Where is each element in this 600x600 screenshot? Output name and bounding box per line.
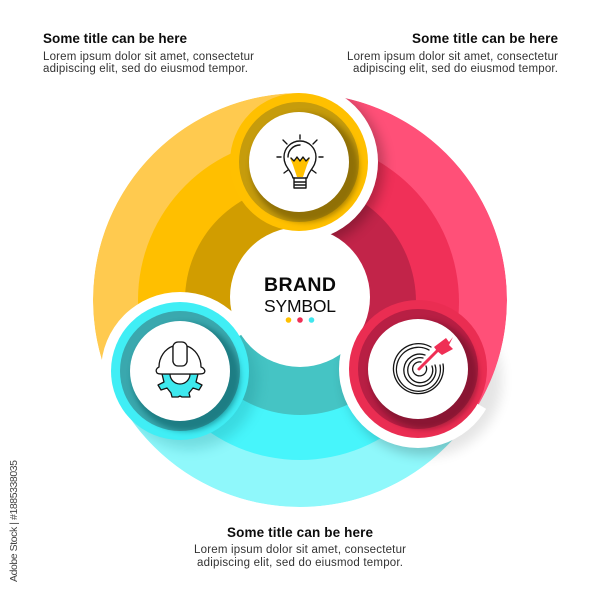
icon: light bulb <box>277 135 323 188</box>
text block: bottom: Some title can be here <box>227 525 373 540</box>
node: left cyan <box>102 292 249 440</box>
colour dots <box>286 317 314 323</box>
center circle: brand symbol <box>230 227 370 367</box>
segment: yellow <box>93 93 298 360</box>
stock credit: Adobe Stock | #1885338035 <box>8 460 20 582</box>
text block: top left <box>43 31 254 75</box>
segment: red <box>330 98 507 404</box>
node: top yellow <box>230 93 378 234</box>
shadow: right node on background <box>350 304 502 456</box>
text block: top left: Lorem ipsum dolor sit amet, consectetur <box>43 51 254 63</box>
text block: bottom: Lorem ipsum dolor sit amet, consectetur <box>194 544 406 556</box>
text block: top left: Some title can be here <box>43 31 187 46</box>
text block: top right <box>347 31 558 75</box>
text block: top right: Lorem ipsum dolor sit amet, consectetur <box>347 51 558 63</box>
text block: top right: adipiscing elit, sed do eiusmod tempor. <box>353 63 558 75</box>
brand word: BRAND <box>264 274 336 296</box>
node: right red <box>339 300 487 448</box>
segment: cyan <box>130 334 478 507</box>
text block: bottom: adipiscing elit, sed do eiusmod tempor. <box>197 557 403 569</box>
text block: bottom <box>194 525 406 569</box>
icon: helmet with gear <box>156 342 205 397</box>
text block: top left: adipiscing elit, sed do eiusmod tempor. <box>43 63 248 75</box>
symbol word: SYMBOL <box>264 296 336 316</box>
text block: top right: Some title can be here <box>412 31 558 46</box>
icon: target with dart <box>393 337 453 394</box>
